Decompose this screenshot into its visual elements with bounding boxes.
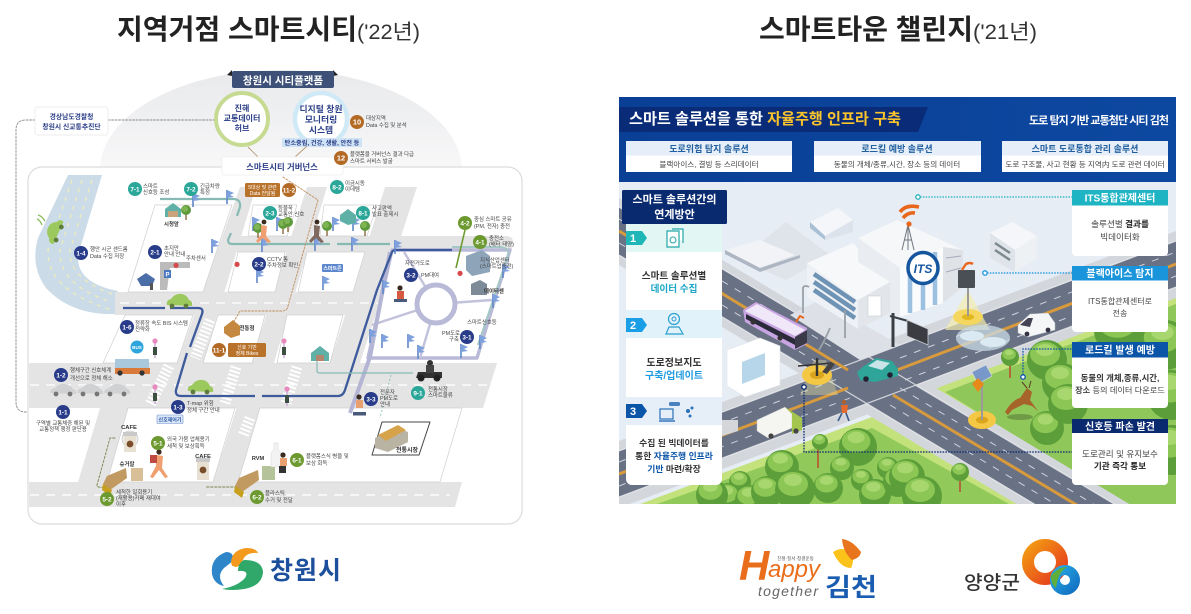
numbered badges on map: 3-2 — [406, 272, 416, 279]
green circle: 진해 교통데이터 허브: 교통데이터 — [224, 113, 260, 123]
traffic lights — [152, 338, 290, 406]
map labels: 등물꾹 — [278, 205, 293, 212]
map labels: 정류장 속도 BIS 시스템 — [135, 319, 188, 327]
teal routes — [160, 199, 508, 418]
map labels: 플랫폼스식 병을 및 — [306, 452, 349, 460]
platform banner: 창원시 시티플랫폼 — [243, 74, 323, 87]
logo: 양양군: 양양군 — [964, 572, 1020, 594]
numbered badges on map: 3-3 — [366, 396, 376, 403]
map labels: 교통안 신호 — [278, 210, 304, 218]
numbered badges on map: 2-3 — [265, 210, 275, 217]
map labels: 초지만 — [164, 244, 179, 252]
logo: Happy together 김천: together — [758, 583, 819, 599]
map labels: CCTV 통 — [267, 256, 288, 263]
card: 블랙아이스 탐지: 블랙아이스 탐지 — [1086, 268, 1154, 280]
icon: teal car — [857, 358, 898, 382]
logo: Happy together 김천: 김천 — [825, 574, 877, 602]
map labels: PM대여 — [421, 271, 439, 279]
numbered badges on map: 9-1 — [413, 390, 423, 397]
badge: 12 governance: 12 — [337, 154, 345, 162]
icon: ITS logo: ITS — [914, 262, 932, 276]
map labels: 보상 회득 — [306, 459, 327, 467]
icon: ITS building — [790, 220, 963, 360]
blue circle: 디지털 창원 모니터링 시스템: 시스템 — [309, 124, 333, 135]
icon: purple bus — [743, 302, 807, 350]
tag boxes on map: 5대상 및 관련 — [248, 184, 277, 191]
map labels: 구축 — [449, 335, 459, 343]
map labels: (배터 태양) — [489, 240, 514, 248]
numbered badges on map — [54, 180, 487, 506]
solution box 2: 동물의 개체/종류,시간, 장소 등의 데이터 — [834, 159, 960, 169]
map labels: 자전거도로 — [405, 259, 430, 267]
map labels: 이후 — [116, 500, 126, 508]
card: ITS통합관제센터: ITS통합관제센터 — [1085, 192, 1155, 204]
logo: Happy together 김천: 친절·질서·청결운동 — [777, 555, 814, 562]
roundabout district — [350, 250, 510, 413]
map labels: 주차정보 확인 — [267, 261, 298, 269]
map labels: 전략화 — [135, 325, 150, 333]
numbered badges on map: 1-4 — [76, 250, 86, 257]
numbered badges on map: 6-2 — [252, 494, 262, 501]
background ground — [619, 182, 1176, 504]
step 1: 1 — [630, 233, 636, 245]
bushes and trees — [696, 320, 1176, 504]
map labels: 슈거팔 — [120, 460, 134, 468]
numbered badges on map: 2-1 — [150, 249, 160, 256]
map labels: 전통시장 — [428, 385, 448, 393]
map labels: PM도로 — [442, 330, 460, 337]
map labels: 외국 가뭄 업체용기 — [167, 435, 210, 443]
map labels: 정체 구간 안내 — [187, 406, 220, 414]
logo: Happy together 김천 — [739, 539, 877, 602]
numbered badges on map: 5-1 — [153, 440, 163, 447]
governance box: 스마트시티 거버넌스 — [246, 162, 318, 172]
column heading: 스마트 솔루션간의 — [632, 193, 717, 206]
title: 스마트타운 챌린지: 스마트타운 챌린지 — [759, 14, 973, 45]
step 1 — [626, 224, 722, 295]
tag boxes on map: Data 전달됨 — [250, 190, 275, 197]
map labels: PM도로 — [380, 395, 398, 402]
icon: signal, VMS sign and poles — [798, 263, 1010, 429]
numbered badges on map: 1-3 — [173, 404, 183, 411]
card: ITS통합관제센터: 빅데이터화 — [1100, 232, 1140, 242]
tag boxes on map: 신호 기반 — [237, 344, 257, 351]
police office label: 창원시 신교통추진단 — [42, 122, 101, 131]
logo: Happy together 김천: H — [739, 542, 771, 589]
numbered badges on map: 4-2 — [460, 220, 470, 227]
map labels: 지식산업센터 — [480, 256, 510, 264]
step 3 — [626, 397, 722, 474]
road network — [28, 187, 513, 507]
icon: antenna and wifi — [900, 206, 919, 250]
platform banner — [227, 70, 338, 88]
card: 블랙아이스 탐지: ITS통합관제센터로 — [1088, 296, 1152, 306]
map labels: 데이터센 — [484, 287, 504, 295]
tag boxes on map: 정체 Bikes — [236, 350, 259, 357]
title: 스마트타운 챌린지: ('21년) — [973, 21, 1037, 44]
badge: 10 data analysis: Data 수집 및 분석 — [366, 121, 407, 129]
green circle: 진해 교통데이터 허브: 허브 — [235, 123, 250, 133]
title: 지역거점 스마트시티: ('22년) — [357, 21, 420, 44]
blue circle: 디지털 창원 모니터링 시스템 — [295, 93, 347, 145]
card: 신호등 파손 발견: 기관 즉각 통보 — [1094, 460, 1146, 471]
map labels: 특정 — [200, 189, 210, 196]
numbered badges on map: 7-2 — [186, 186, 196, 193]
numbered badges on map: 1-6 — [122, 324, 132, 331]
tag boxes on map: 신호제어기 — [158, 416, 182, 424]
logo: 창원시: 창원시 — [270, 557, 341, 585]
step 2: 구축/업데이트 — [645, 369, 703, 382]
icon: small buildings — [725, 208, 1037, 397]
badge: 10 data analysis: 10 — [353, 118, 361, 126]
solution box 3: 도로 구조물, 사고 현황 등 지역内 도로 관련 데이터 — [1005, 159, 1165, 169]
map labels: 수거 및 전달 — [265, 496, 293, 504]
step 3: 기반 마련/확장 — [647, 463, 701, 474]
map labels: 행안 시군 센드롬 — [90, 245, 128, 253]
blue circle: 디지털 창원 모니터링 시스템: 디지털 창원 — [300, 103, 342, 114]
map labels: 충전소 — [489, 234, 504, 242]
numbered badges on map: 1-2 — [56, 372, 66, 379]
column heading: 연계방안 — [654, 207, 695, 221]
icon: vehicles: BUS — [132, 345, 142, 350]
roads — [619, 207, 1176, 504]
scene subtitle: 도로 탐지 기반 교통첨단 시티 김천 — [1029, 113, 1169, 127]
green dashed delivery lines — [97, 438, 245, 487]
tag boxes on map — [157, 183, 343, 424]
blue circle: 디지털 창원 모니터링 시스템: 모니터링 — [305, 114, 337, 124]
left column: 연계방안 — [622, 190, 727, 485]
map labels: (스마트업충전) — [480, 262, 514, 270]
map labels: CAFE — [121, 425, 137, 431]
step 2: 도로정보지도 — [646, 357, 702, 369]
solution box 3 — [1002, 141, 1168, 172]
card: 로드킬 발생 예방: 동물의 개체,종류,시간, — [1081, 373, 1159, 383]
map labels: RVM — [252, 456, 264, 462]
card: 신호등 파손 발견 — [1072, 419, 1168, 485]
column heading — [622, 190, 727, 224]
map labels: 중심 스마트 공유 — [474, 215, 512, 223]
map labels: (PM, 전자) 충전 — [474, 222, 510, 230]
map labels: 주차센서 — [186, 254, 206, 262]
badge: 12 governance: 스마트 서비스 발굴 — [350, 157, 393, 165]
governance box — [222, 157, 343, 175]
solution box 1 — [626, 141, 792, 172]
market box: 전통시장 — [396, 446, 419, 454]
road dashes and crosswalks — [30, 303, 490, 495]
map labels: 스마트 — [143, 182, 158, 190]
numbered badges on map: 3-1 — [462, 334, 472, 341]
map labels: 사고판액 — [372, 204, 392, 212]
brown dashed line — [233, 177, 318, 323]
map labels: 신호등 조성 — [143, 188, 169, 196]
card: 로드킬 발생 예방 — [1072, 342, 1168, 408]
logo: 창원시 — [212, 548, 341, 590]
map labels: 플라스틱 — [265, 489, 285, 497]
icon: pedestrian — [838, 400, 849, 421]
title: 지역거점 스마트시티: 지역거점 스마트시티 — [117, 14, 357, 45]
card: ITS통합관제센터 — [1072, 190, 1168, 256]
lawns — [640, 298, 1176, 504]
green circle: 진해 교통데이터 허브: 진해 — [235, 103, 249, 113]
top blue band — [619, 97, 1176, 182]
step 2: 2 — [630, 320, 636, 332]
light blue service band: 탄소중립, 건강, 생활, 안전 등 — [285, 139, 360, 147]
map labels: 발표 출제시 — [372, 210, 398, 218]
badge: 10 data analysis: 대상지역 — [366, 114, 386, 122]
map labels: 세척 및 보상획득 — [167, 442, 205, 450]
map labels: 전문자 — [380, 388, 395, 396]
map labels: 구역별 교통체증 해된 및 — [36, 419, 90, 427]
curved blue road — [35, 175, 118, 314]
numbered badges on map: 5-2 — [102, 496, 112, 503]
card: ITS통합관제센터: 솔루션별 결과를 — [1091, 218, 1149, 229]
dotted leader lines — [802, 195, 1072, 452]
solution box 1: 도로위험 탐지 솔루션 — [669, 143, 749, 154]
numbered badges on map: 1-1 — [58, 409, 68, 416]
card: 블랙아이스 탐지: 전송 — [1113, 308, 1127, 318]
badge: 12 governance — [334, 150, 414, 165]
icon: buildings and trees — [122, 203, 490, 481]
map labels: 교통정책 행정 판단용 — [39, 425, 87, 433]
step 1: 데이터 수집 — [651, 283, 697, 295]
map labels: 안내 안내 — [164, 250, 185, 258]
step 3: 통한 자율주행 인프라 — [635, 450, 713, 461]
card: 신호등 파손 발견: 도로관리 및 유지보수 — [1082, 448, 1158, 459]
map labels: 안내 — [380, 400, 390, 408]
panel: 창원시 city platform diagram — [16, 70, 522, 524]
map labels: 스마트물류 — [428, 391, 453, 399]
icon: ITS logo — [908, 252, 938, 284]
map labels: 세척한 일회용기 — [116, 488, 152, 496]
logo: Happy together 김천: appy — [768, 556, 822, 583]
numbered badges on map: 8-2 — [332, 184, 342, 191]
icon: deer — [1005, 381, 1038, 420]
numbered badges on map: 7-1 — [130, 186, 140, 193]
green circle: 진해 교통데이터 허브 — [216, 93, 268, 145]
card: 신호등 파손 발견: 신호등 파손 발견 — [1085, 420, 1155, 433]
solution box 3: 스마트 도로통합 관리 솔루션 — [1032, 143, 1138, 154]
road lines — [619, 206, 1176, 504]
icon: gray car at road edge — [722, 420, 738, 436]
icon: people — [150, 220, 407, 478]
map labels: 개선으로 정체 해소 — [70, 374, 113, 382]
tag boxes on map: 스마트존 — [323, 265, 342, 272]
map labels: 스마트신호등 — [467, 318, 497, 326]
map labels: 전통점 — [240, 324, 254, 332]
flags — [193, 190, 510, 359]
icon: vehicles — [37, 215, 442, 498]
numbered badges on map: 11-2 — [283, 187, 296, 194]
map labels: Data 수집 저장 — [90, 252, 124, 260]
sidewalks — [619, 198, 1176, 504]
card: 로드킬 발생 예방: 로드킬 발생 예방 — [1085, 344, 1155, 356]
map labels: CAFE — [195, 454, 211, 460]
market box — [372, 422, 430, 455]
white city blocks — [103, 205, 462, 482]
police office label: 경상남도경찰청 — [50, 112, 93, 121]
logo: 양양군 — [964, 545, 1075, 594]
step 3: 수집 된 빅데이터를 — [639, 437, 709, 448]
map labels: 이금시동 — [345, 179, 365, 187]
map labels — [36, 179, 514, 508]
map labels: 긴급차량 — [200, 182, 220, 190]
solution box 1: 블랙아이스, 결빙 등 스리데이터 — [659, 159, 759, 169]
numbered badges on map: 4-1 — [475, 239, 485, 246]
arrows to platform — [248, 146, 307, 160]
panel: 김천 smart town scene — [619, 97, 1176, 504]
platform dome background — [100, 70, 462, 170]
step 1: 스마트 솔루션별 — [642, 270, 706, 282]
icon: truck — [757, 407, 802, 439]
numbered badges on map: 2-2 — [254, 261, 264, 268]
solution box 2 — [814, 141, 981, 172]
scene title: 스마트 솔루션을 통한 자율주행 인프라 구축 — [629, 111, 901, 128]
icon: white van — [1018, 313, 1055, 337]
map labels: 이데템 — [345, 185, 360, 193]
police office label — [35, 107, 108, 135]
badge: 12 governance: 플랫폼을 거버넌스 결과 다급 — [350, 150, 414, 158]
map labels: T-map 위험 — [187, 399, 214, 407]
step 2 — [626, 310, 722, 382]
map labels: 시청앞 — [164, 220, 179, 228]
solution box 2: 로드킬 예방 솔루션 — [861, 143, 933, 154]
icon: buildings and trees: P — [166, 272, 170, 278]
navy route line — [123, 250, 452, 396]
numbered badges on map: 8-1 — [358, 210, 368, 217]
numbered badges on map: 11-1 — [213, 347, 226, 354]
card: 로드킬 발생 예방: 장소 등의 데이터 다운로드 — [1075, 385, 1165, 395]
card: 블랙아이스 탐지 — [1072, 266, 1168, 332]
city map panel — [28, 167, 522, 524]
map labels: (재활용)카페 재대여 — [116, 494, 161, 502]
badge: 10 data analysis — [350, 114, 407, 129]
map labels: 행체구간 신호체계 — [70, 366, 111, 374]
numbered badges on map: 6-1 — [292, 457, 302, 464]
outer dashed link from police office — [16, 120, 215, 412]
step 3: 3 — [630, 406, 636, 418]
